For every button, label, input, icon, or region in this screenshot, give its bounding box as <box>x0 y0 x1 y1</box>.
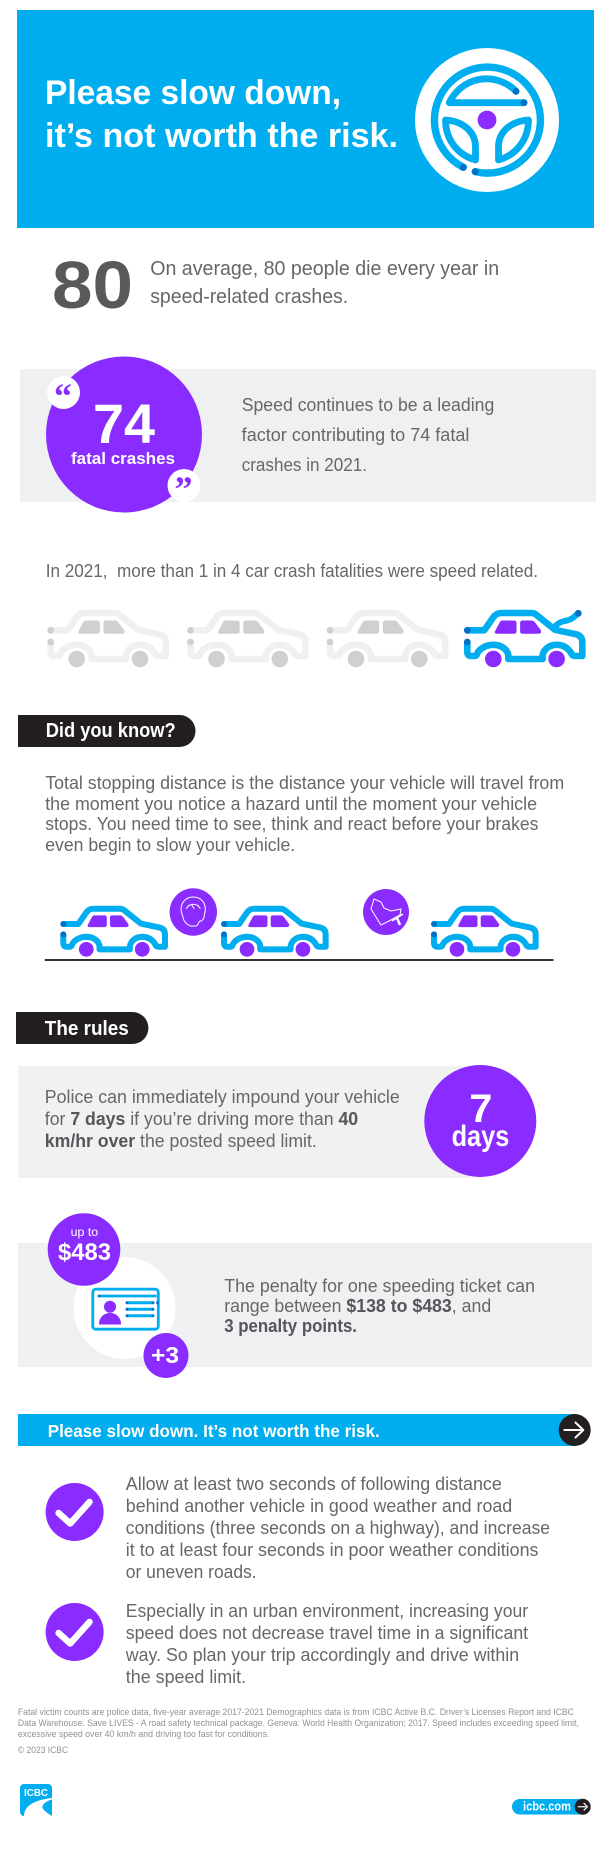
purple badge: fatal crashes <box>71 450 175 468</box>
panel: speeding ticket penalty <box>18 1213 592 1378</box>
panel text <box>224 1276 535 1336</box>
icon: check <box>46 1603 104 1661</box>
purple badge: 7 <box>469 1087 492 1131</box>
tip text: or uneven roads. <box>126 1562 257 1582</box>
tip text: speed does not decrease travel time in a significant <box>126 1623 528 1643</box>
link: icbc.com: icbc.com <box>523 1800 571 1814</box>
heading: did you know: Did you know? <box>46 720 176 742</box>
icon: check <box>46 1483 104 1541</box>
icon: arrow <box>559 1414 591 1446</box>
diagram: stopping distance <box>45 888 554 961</box>
icon: blue car with open trunk <box>464 610 582 667</box>
icon: grey car 1 <box>47 613 166 667</box>
panel: 7 days impound <box>18 1065 536 1178</box>
panel text: range between $138 to $483, and <box>224 1296 491 1316</box>
icon: steering wheel <box>415 48 559 192</box>
tip: following distance <box>46 1474 550 1582</box>
icon: car stopped <box>431 909 536 957</box>
footnote: © 2023 ICBC <box>18 1745 68 1755</box>
banner: please slow down <box>18 1414 591 1446</box>
purple badge <box>46 356 202 512</box>
purple badge: 74 <box>93 392 155 455</box>
text: stopping distance: the moment you notice a hazard until the moment your vehicle <box>45 794 537 814</box>
panel text: for 7 days if you’re driving more than 40 <box>45 1109 358 1129</box>
panel text <box>242 395 494 475</box>
logo: ICBC: ICBC <box>24 1787 48 1799</box>
stat: 80 deaths: speed-related crashes. <box>150 286 348 308</box>
footnote: excessive speed over 40 km/h and driving too fast for conditions. <box>18 1729 270 1739</box>
text: stopping distance: stops. You need time to see, think and react before your brakes <box>45 814 538 834</box>
purple badge: days <box>452 1120 509 1153</box>
tip text <box>125 1601 528 1687</box>
footnote: Data Warehouse. Save LIVES - A road safety technical package. Geneva: World Health Organization; 2017. Speed includes exceeding speed limit, <box>18 1718 579 1728</box>
heading: the rules <box>16 1012 148 1044</box>
text: stopping distance: even begin to slow your vehicle. <box>45 835 295 855</box>
heading: the rules: The rules <box>45 1018 129 1040</box>
icon: opening quote: “ <box>54 376 72 416</box>
icon: foot on brake pedal <box>363 889 409 935</box>
panel text: crashes in 2021. <box>242 455 367 475</box>
title <box>45 74 398 155</box>
tip: urban travel time <box>46 1601 528 1687</box>
panel text: 3 penalty points. <box>224 1316 357 1336</box>
icon: car before thinking <box>60 909 165 957</box>
title: Please slow down, <box>45 74 341 112</box>
panel: 74 fatal crashes <box>20 356 596 512</box>
badge: up to $483 <box>48 1213 120 1286</box>
icon: head with gauge <box>170 888 217 936</box>
badge: up to $483: $483 <box>58 1239 111 1266</box>
badge: +3 points <box>144 1333 188 1378</box>
link: icbc.com <box>512 1799 591 1815</box>
icon: arrow <box>575 1799 591 1815</box>
panel text: Police can immediately impound your vehicle <box>45 1087 400 1107</box>
footnote: Fatal victim counts are police data, five-year average 2017-2021 Demographics data is from ICBC Active B.C. Driver’s Licenses Report and ICBC <box>18 1707 574 1717</box>
banner: please slow down: Please slow down. It’s not worth the risk. <box>48 1421 380 1441</box>
panel text: factor contributing to 74 fatal <box>242 425 469 445</box>
stat: 80 deaths: 80 <box>52 248 133 323</box>
icon: driver licence <box>74 1257 176 1359</box>
stat: 80 deaths <box>52 248 499 323</box>
badge: +3 points: +3 <box>151 1342 179 1368</box>
tip text: Allow at least two seconds of following distance <box>126 1474 502 1494</box>
tip text <box>126 1474 550 1582</box>
text: 1 in 4: In 2021, more than 1 in 4 car crash fatalities were speed related. <box>46 561 538 581</box>
icon: grey car 2 <box>187 613 306 667</box>
logo: ICBC <box>20 1784 52 1816</box>
icon: grey car 3 <box>327 613 445 667</box>
title: it’s not worth the risk. <box>45 117 398 155</box>
icon: closing quote <box>168 469 200 509</box>
purple badge <box>424 1065 536 1177</box>
panel text: The penalty for one speeding ticket can <box>224 1276 535 1296</box>
footnote <box>18 1707 579 1755</box>
tip text: conditions (three seconds on a highway), and increase <box>126 1518 550 1538</box>
icon: car while reacting <box>221 909 326 957</box>
text: stopping distance: Total stopping distance is the distance your vehicle will travel from <box>45 773 564 793</box>
panel text <box>45 1087 400 1151</box>
stat: 80 deaths: On average, 80 people die every year in <box>150 258 499 280</box>
tip text: the speed limit. <box>126 1667 246 1687</box>
tip text: way. So plan your trip accordingly and drive within <box>125 1645 519 1665</box>
tip text: behind another vehicle in good weather and road <box>126 1496 512 1516</box>
badge: up to $483: up to <box>71 1225 99 1239</box>
banner <box>17 10 594 228</box>
icon: closing quote: ” <box>174 469 192 509</box>
tip text: it to at least four seconds in poor weather conditions <box>126 1540 539 1560</box>
tip text: Especially in an urban environment, increasing your <box>126 1601 528 1621</box>
panel text: km/hr over the posted speed limit. <box>45 1131 317 1151</box>
heading: did you know <box>18 715 196 747</box>
panel text: Speed continues to be a leading <box>242 395 494 415</box>
text: stopping distance <box>45 773 564 855</box>
icon: opening quote <box>47 376 80 416</box>
